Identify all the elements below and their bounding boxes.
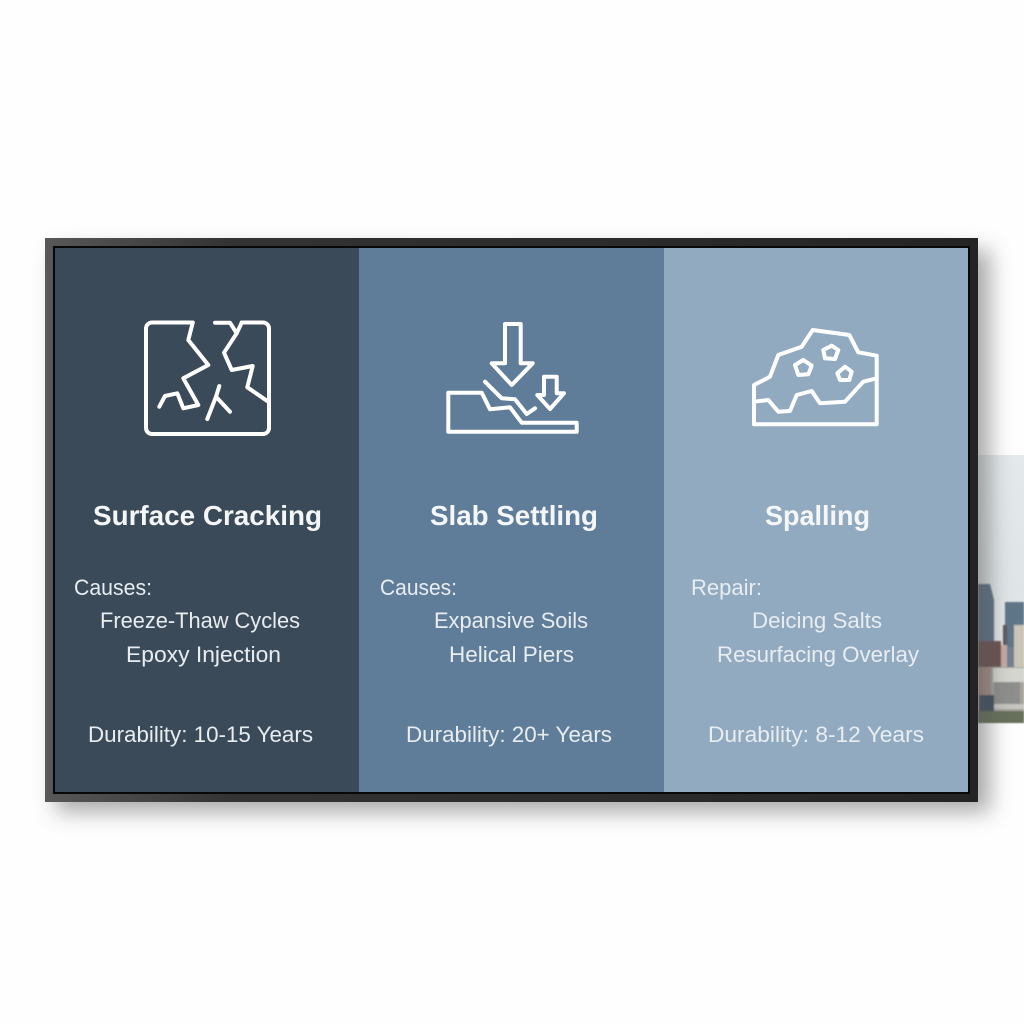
- icon: settling slab with arrows: [448, 324, 577, 432]
- heading: Spalling: Spalling: [765, 500, 870, 531]
- durability: Durability: 10-15 Years: [88, 722, 313, 747]
- repair text: Epoxy Injection: [126, 642, 281, 667]
- durability: Durability: 20+ Years: [406, 722, 612, 747]
- causes label: Causes:: [380, 575, 457, 600]
- repair text: Resurfacing Overlay: [717, 642, 919, 667]
- cause text: Deicing Salts: [752, 608, 882, 633]
- repair label: Repair:: [691, 575, 762, 600]
- panel: Surface Cracking: [55, 248, 359, 792]
- city skyline photo behind the frame: [978, 455, 1024, 723]
- heading: Surface Cracking: Surface Cracking: [93, 500, 322, 531]
- panel: Spalling: [664, 248, 968, 792]
- cause text: Expansive Soils: [434, 608, 588, 633]
- heading: Slab Settling: Slab Settling: [430, 500, 598, 531]
- panel: Slab Settling: [359, 248, 664, 792]
- durability: Durability: 8-12 Years: [708, 722, 924, 747]
- cause text: Freeze-Thaw Cycles: [100, 608, 300, 633]
- dark picture frame: [45, 238, 978, 802]
- icon: cracked surface: [146, 322, 269, 434]
- icon: spalled concrete chunk: [754, 330, 877, 424]
- frame drop shadow: [56, 250, 990, 812]
- causes label: Causes:: [74, 575, 152, 600]
- repair text: Helical Piers: [449, 642, 574, 667]
